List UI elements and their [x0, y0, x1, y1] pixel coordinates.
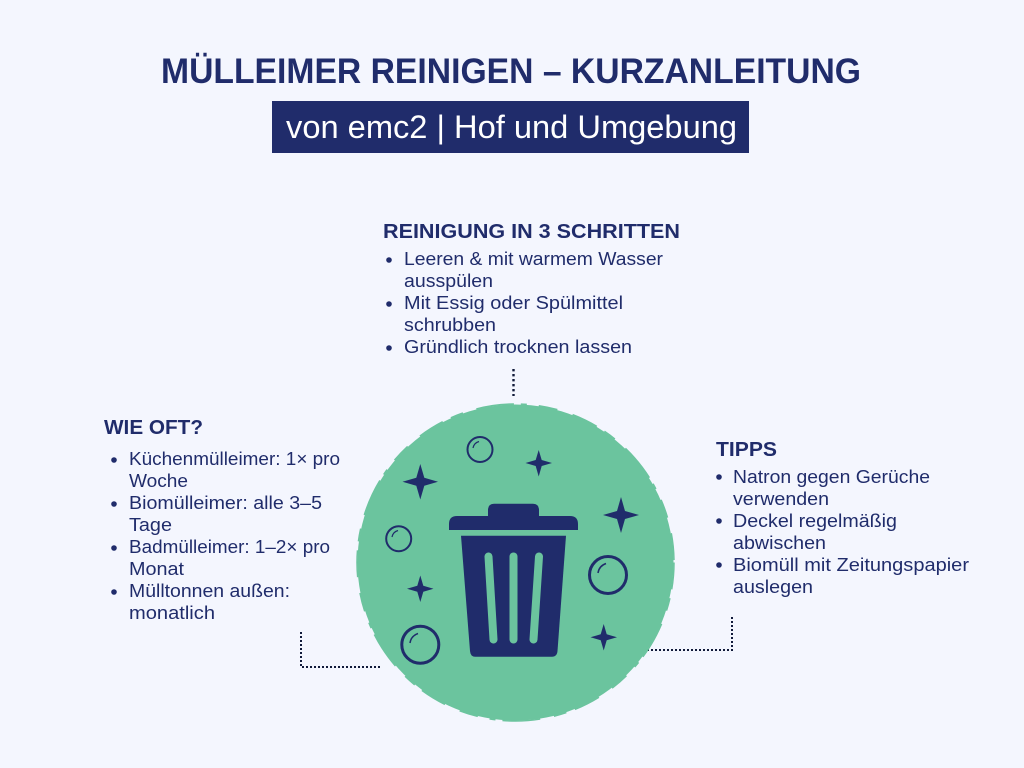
connector: right dotted line — [646, 617, 732, 650]
list: Häufigkeit: Biomülleimer: alle 3–5 — [129, 493, 322, 513]
bin lid — [449, 504, 578, 530]
bin body — [461, 536, 566, 657]
list: Tipps — [716, 467, 969, 597]
bin slots — [488, 556, 539, 640]
list: Schritte: ausspülen — [404, 271, 493, 291]
list: Tipps: Natron gegen Gerüche — [733, 467, 930, 487]
list: Häufigkeit: Monat — [129, 559, 184, 579]
heading: Tipps: TIPPS — [716, 438, 777, 461]
list: Schritte — [386, 249, 663, 357]
list: Tipps: Deckel regelmäßig — [733, 511, 897, 531]
heading: Wie oft?: WIE OFT? — [104, 416, 203, 439]
list: Häufigkeit: Küchenmülleimer: 1× pro — [129, 449, 340, 469]
heading: Reinigung in 3 Schritten: REINIGUNG IN 3 SCHRITTEN — [383, 220, 680, 243]
panel: Wie oft? — [104, 416, 340, 623]
list: Tipps: Biomüll mit Zeitungspapier — [733, 555, 969, 575]
list: Häufigkeit: Badmülleimer: 1–2× pro — [129, 537, 330, 557]
list: Schritte: Gründlich trocknen lassen — [404, 337, 632, 357]
brushed green circle — [357, 404, 674, 721]
panel: Tipps — [716, 438, 969, 597]
connector: left dotted line — [301, 632, 382, 667]
panel: Reinigung in 3 Schritten — [383, 220, 680, 357]
subtitle banner — [272, 101, 749, 153]
list: Tipps: verwenden — [733, 489, 829, 509]
list: Häufigkeit — [111, 449, 340, 623]
subtitle banner: von emc2 | Hof und Umgebung — [286, 109, 737, 145]
icon: bubbles — [386, 437, 626, 663]
list: Häufigkeit: Tage — [129, 515, 172, 535]
list: Tipps: auslegen — [733, 577, 813, 597]
list: Tipps: abwischen — [733, 533, 826, 553]
list: Schritte: schrubben — [404, 315, 496, 335]
title: MÜLLEIMER REINIGEN – KURZANLEITUNG — [161, 52, 861, 91]
list: Schritte: Mit Essig oder Spülmittel — [404, 293, 623, 313]
icon: sparkles — [402, 450, 639, 650]
list: Häufigkeit: Mülltonnen außen: — [129, 581, 290, 601]
connector: top dotted line — [512, 369, 515, 396]
list: Häufigkeit: Woche — [129, 471, 188, 491]
list: Schritte: Leeren & mit warmem Wasser — [404, 249, 663, 269]
list: Häufigkeit: monatlich — [129, 603, 215, 623]
icon: trash bin — [449, 504, 578, 657]
